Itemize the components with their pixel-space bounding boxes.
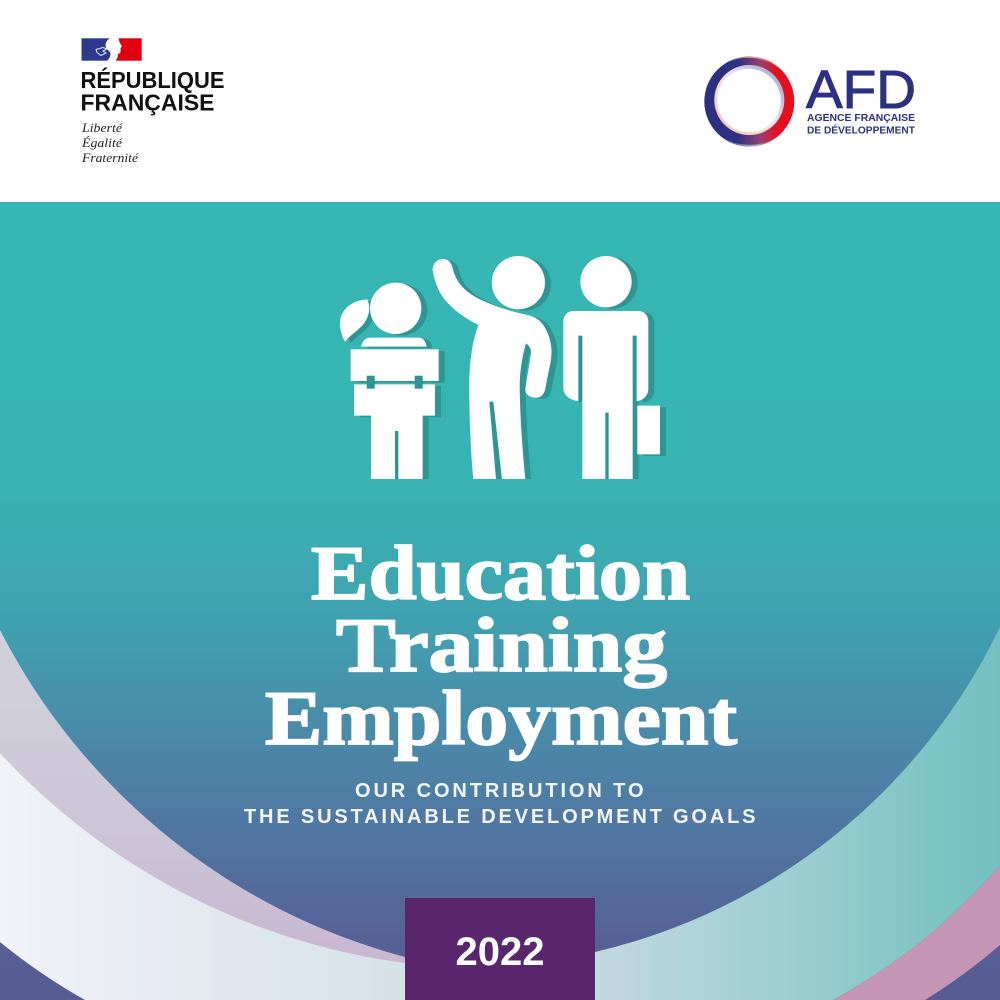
heading: République Française wordmark: RÉPUBLIQUE: [80, 66, 224, 93]
icon: French flag with Marianne: [82, 38, 142, 61]
subtitle: THE SUSTAINABLE DEVELOPMENT GOALS: [244, 806, 756, 828]
text: Agence Française de Développement: AGENCE FRANÇAISE: [807, 113, 915, 124]
logo: AFD: [704, 56, 916, 147]
subtitle: OUR CONTRIBUTION TO: [355, 780, 644, 802]
text: national motto: Liberté: [81, 120, 123, 135]
icon: girl, raised-arm man and man with briefcase: [340, 256, 666, 480]
text: Agence Française de Développement: DE DÉVELOPPEMENT: [807, 123, 916, 136]
right aqua arc band: [595, 627, 1000, 1000]
subtitle: [244, 780, 756, 828]
title: Employment: [265, 675, 737, 761]
logo: République Française: [80, 38, 224, 165]
text: national motto: Égalité: [81, 135, 123, 150]
icon: satchel clasps: [367, 376, 423, 389]
heading: AFD wordmark: AFD: [806, 60, 916, 120]
text: national motto: Fraternité: [81, 150, 139, 165]
text: year: 2022: [456, 930, 544, 974]
heading: République Française wordmark: [80, 66, 224, 116]
left pale arc band: [0, 753, 405, 1000]
title: Education: [311, 530, 690, 616]
heading: République Française wordmark: FRANÇAISE: [80, 90, 214, 116]
background panel: [0, 202, 1000, 1000]
title: Training: [336, 602, 667, 688]
right pink arc band: [833, 865, 1000, 1000]
title: [265, 530, 737, 761]
text: national motto: [81, 120, 139, 165]
icon: AFD ring: [704, 56, 794, 147]
year badge: [405, 898, 595, 1000]
left lilac arc band: [0, 630, 405, 964]
text: Agence Française de Développement: [807, 113, 916, 136]
